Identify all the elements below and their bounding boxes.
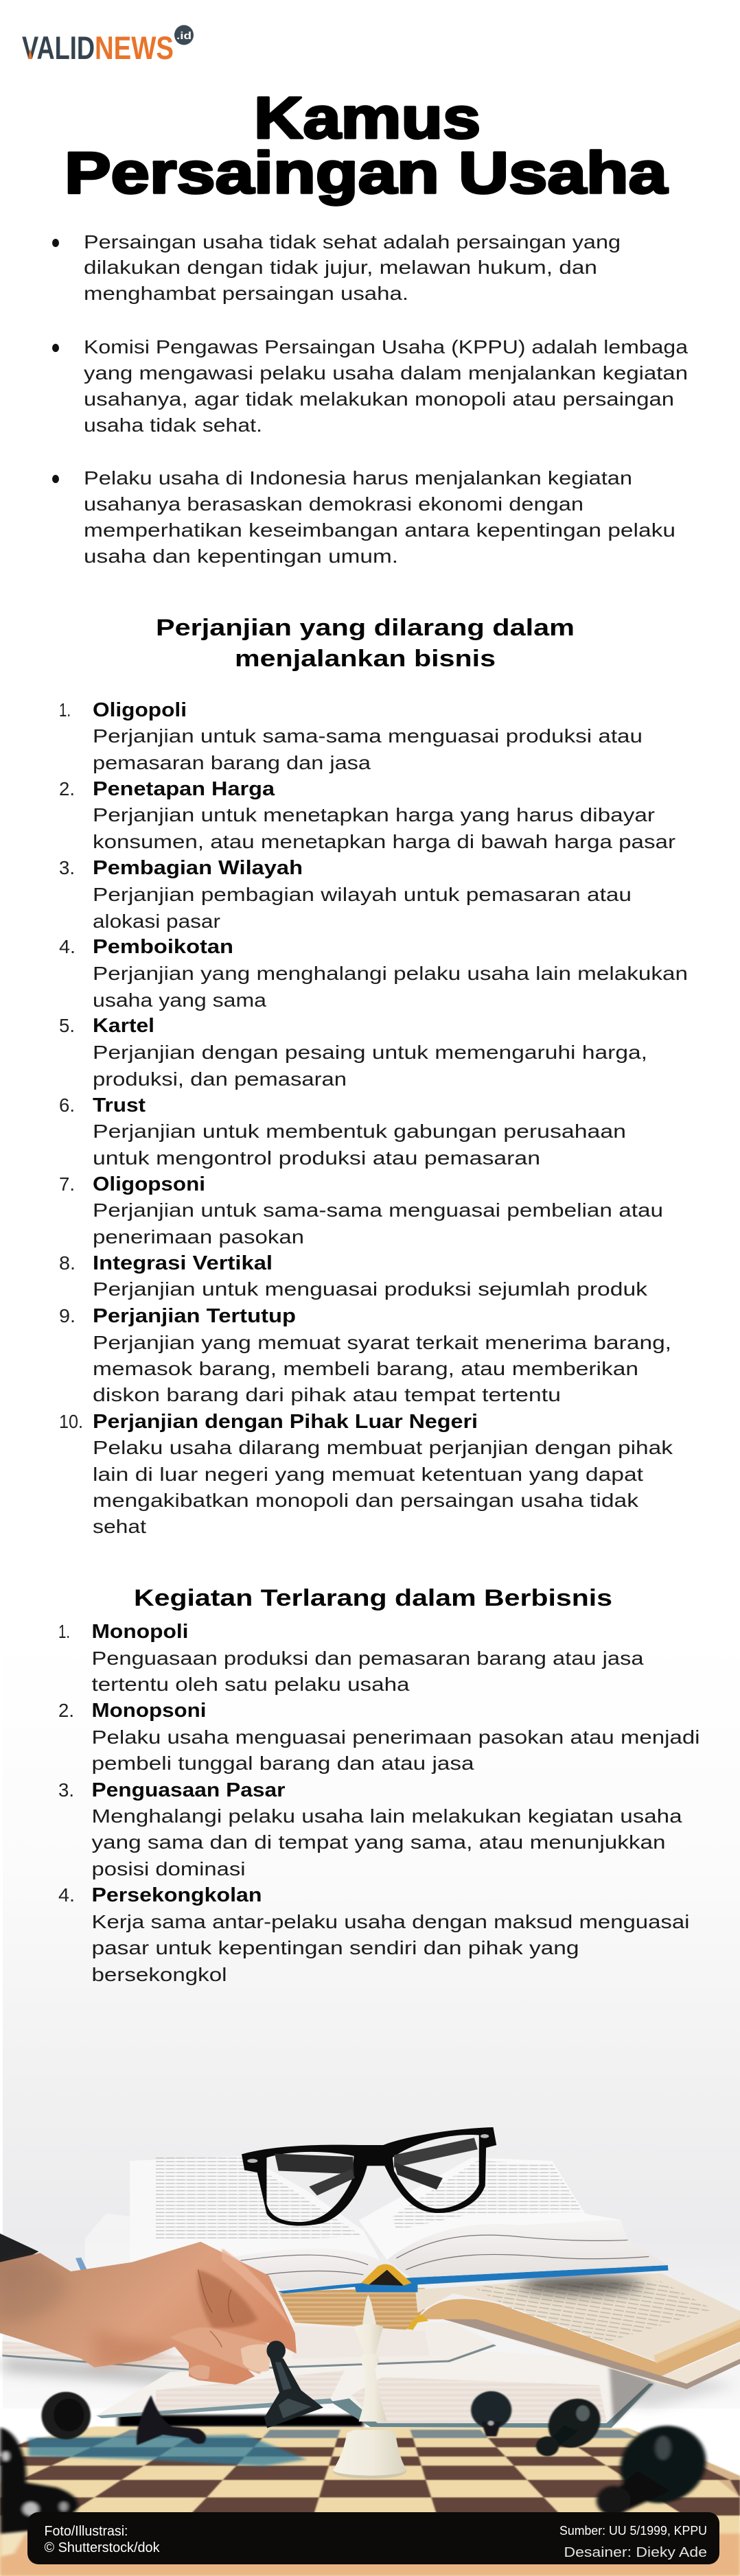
item 9: diskon barang dari pihak atau tempat tertentu (93, 1384, 561, 1405)
illustration: chess and books (0, 2127, 740, 2576)
item 10 (59, 1411, 673, 1537)
item 6 (59, 1094, 626, 1169)
large black pawn, left foreground (0, 2428, 78, 2533)
bullet 1: menghambat persaingan usaha. (84, 283, 408, 304)
item 1: Monopoli (92, 1621, 188, 1643)
title (65, 86, 668, 206)
logo: Validnews.id: VALID (22, 30, 95, 66)
bullet 3 (52, 467, 675, 567)
item 1 (59, 699, 643, 773)
item 2: 2. (58, 1700, 74, 1721)
item 9: memasok barang, membeli barang, atau memberikan (93, 1358, 638, 1379)
heading: perjanjian yang dilarang: Perjanjian yang dilarang dalam (156, 615, 575, 641)
item 2: 2. (59, 778, 75, 799)
item 7: Oligopsoni (93, 1173, 205, 1195)
fallen black pawn, left (42, 2392, 91, 2439)
item 2: konsumen, atau menetapkan harga di bawah harga pasar (93, 831, 675, 852)
item 2: Penetapan Harga (93, 778, 275, 800)
item 2 (58, 1700, 700, 1774)
item 5: 5. (59, 1015, 75, 1036)
item 9: Perjanjian Tertutup (93, 1305, 296, 1327)
item 4: 4. (59, 936, 76, 957)
item 5: produksi, dan pemasaran (93, 1068, 347, 1090)
item 10: Pelaku usaha dilarang membuat perjanjian dengan pihak (93, 1437, 673, 1458)
item 3 (59, 857, 632, 932)
list: kegiatan terlarang (58, 1621, 700, 1985)
item 3: 3. (58, 1779, 74, 1801)
bullet 3: Pelaku usaha di Indonesia harus menjalankan kegiatan (84, 467, 632, 489)
item 8 (59, 1252, 648, 1300)
item 1 (58, 1621, 644, 1695)
item 1: tertentu oleh satu pelaku usaha (92, 1674, 410, 1695)
item 3: Penguasaan Pasar (92, 1779, 286, 1801)
item 4: pasar untuk kepentingan sendiri dan pihak yang (92, 1937, 579, 1958)
item 10: 10. (59, 1411, 83, 1432)
item 4: Perjanjian yang menghalangi pelaku usaha lain melakukan (93, 963, 688, 984)
item 4: Persekongkolan (92, 1884, 262, 1906)
fallen black pawn, right 1 (471, 2391, 511, 2437)
item 1: Oligopoli (93, 699, 187, 721)
item 8: Perjanjian untuk menguasai produksi sejumlah produk (93, 1278, 648, 1300)
item 5 (59, 1015, 647, 1090)
credit: source and designer (559, 2524, 707, 2560)
large black pawn, right foreground (597, 2421, 715, 2516)
credit: source and designer: Desainer: Dieky Ade (564, 2545, 707, 2560)
middle white book (2, 2323, 496, 2372)
faded book behind (76, 2214, 137, 2271)
bullet 3: usaha dan kepentingan umum. (84, 546, 398, 567)
item 10: lain di luar negeri yang memuat ketentuan yang dapat (93, 1464, 643, 1485)
item 6: Perjanjian untuk membentuk gabungan perusahaan (93, 1121, 626, 1142)
credit: source and designer: Sumber: UU 5/1999, KPPU (559, 2524, 707, 2538)
fallen black pawn, cone (137, 2395, 206, 2445)
item 1: Penguasaan produksi dan pemasaran barang atau jasa (92, 1648, 644, 1669)
credit: photo: Foto/Illustrasi: (44, 2524, 128, 2539)
title: Persaingan Usaha (65, 141, 668, 206)
credit: photo: © Shutterstock/dok (44, 2540, 160, 2555)
bullet 3: memperhatikan keseimbangan antara kepentingan pelaku (84, 519, 675, 541)
item 3: alokasi pasar (93, 911, 220, 932)
bullet 2: Komisi Pengawas Persaingan Usaha (KPPU) adalah lembaga (84, 336, 688, 358)
hand holding pawn (0, 2242, 297, 2385)
item 7: penerimaan pasokan (93, 1226, 304, 1248)
ground shadow (2, 2357, 189, 2385)
item 2: Pelaku usaha menguasai penerimaan pasokan atau menjadi (92, 1726, 700, 1748)
credit: photo (44, 2524, 160, 2555)
item 3: Pembagian Wilayah (93, 857, 303, 879)
bullet 1: Persaingan usaha tidak sehat adalah persaingan yang (84, 231, 621, 253)
bottom open book (95, 2351, 654, 2428)
item 1: 1. (58, 1621, 70, 1642)
item 10: Perjanjian dengan Pihak Luar Negeri (93, 1411, 478, 1433)
item 5: Perjanjian dengan pesaing untuk memengaruhi harga, (93, 1042, 647, 1063)
icon: black glasses (242, 2127, 496, 2226)
black pawn held in hand (264, 2341, 323, 2428)
item 8: 8. (59, 1252, 76, 1274)
heading: perjanjian yang dilarang: menjalankan bisnis (235, 646, 496, 672)
item 2: pembeli tunggal barang dan atau jasa (92, 1753, 474, 1774)
item 2 (59, 778, 675, 852)
item 5: Kartel (93, 1015, 154, 1037)
chessboard (0, 2426, 740, 2576)
tan open book (279, 2273, 740, 2389)
item 4: bersekongkol (92, 1964, 227, 1985)
item 4: Kerja sama antar-pelaku usaha dengan maksud menguasai (92, 1911, 689, 1932)
item 4: Pemboikotan (93, 936, 233, 958)
logo: Validnews.id (22, 25, 194, 66)
bullet 1 (52, 231, 621, 304)
item 9 (59, 1305, 671, 1405)
credit bar (27, 2512, 719, 2564)
item 2: Perjanjian untuk menetapkan harga yang harus dibayar (93, 804, 655, 826)
item 7: Perjanjian untuk sama-sama menguasai pembelian atau (93, 1199, 663, 1221)
logo: Validnews.id: .id (176, 30, 192, 42)
bullet 3: usahanya berasaskan demokrasi ekonomi dengan (84, 493, 583, 515)
item 4: usaha yang sama (93, 990, 266, 1011)
item 10: sehat (93, 1516, 146, 1537)
item 3: yang sama dan di tempat yang sama, atau menunjukkan (92, 1831, 666, 1853)
bullet 2: usaha tidak sehat. (84, 414, 262, 436)
intro bullet list (52, 231, 688, 567)
bullet 2: usahanya, agar tidak melakukan monopoli atau persaingan (84, 388, 674, 410)
item 7 (59, 1173, 663, 1248)
item 9: Perjanjian yang memuat syarat terkait menerima barang, (93, 1332, 671, 1353)
item 6: Trust (93, 1094, 146, 1116)
item 7: 7. (59, 1173, 75, 1195)
item 9: 9. (59, 1305, 76, 1326)
item 1: pemasaran barang dan jasa (93, 752, 371, 773)
bullet 1: dilakukan dengan tidak jujur, melawan hukum, dan (84, 257, 597, 278)
fallen black pawn, right 2 (536, 2396, 607, 2456)
bullet 2 (52, 336, 688, 436)
blue open book (130, 2156, 669, 2293)
item 6: untuk mengontrol produksi atau pemasaran (93, 1147, 540, 1169)
item 1: 1. (59, 699, 71, 721)
list: perjanjian yang dilarang (59, 699, 688, 1537)
item 2: Monopsoni (92, 1700, 206, 1722)
item 3: Perjanjian pembagian wilayah untuk pemasaran atau (93, 884, 632, 905)
item 1: Perjanjian untuk sama-sama menguasai produksi atau (93, 725, 643, 747)
item 8: Integrasi Vertikal (93, 1252, 273, 1274)
item 4 (58, 1884, 689, 1985)
item 3: posisi dominasi (92, 1858, 246, 1880)
item 10: mengakibatkan monopoli dan persaingan usaha tidak (93, 1490, 639, 1511)
sleeve (0, 2234, 38, 2271)
white king piece (333, 2295, 407, 2479)
item 6: 6. (59, 1094, 75, 1116)
bullet 2: yang mengawasi pelaku usaha dalam menjalankan kegiatan (84, 362, 688, 384)
item 4: 4. (58, 1884, 75, 1906)
item 3 (58, 1779, 682, 1880)
logo: Validnews.id: NEWS (95, 30, 174, 66)
title: Kamus (254, 86, 481, 151)
heading: kegiatan terlarang: Kegiatan Terlarang dalam Berbisnis (134, 1585, 612, 1611)
heading: perjanjian yang dilarang (156, 615, 575, 672)
item 3: 3. (59, 857, 75, 878)
item 3: Menghalangi pelaku usaha lain melakukan kegiatan usaha (92, 1805, 682, 1827)
item 4 (59, 936, 688, 1011)
